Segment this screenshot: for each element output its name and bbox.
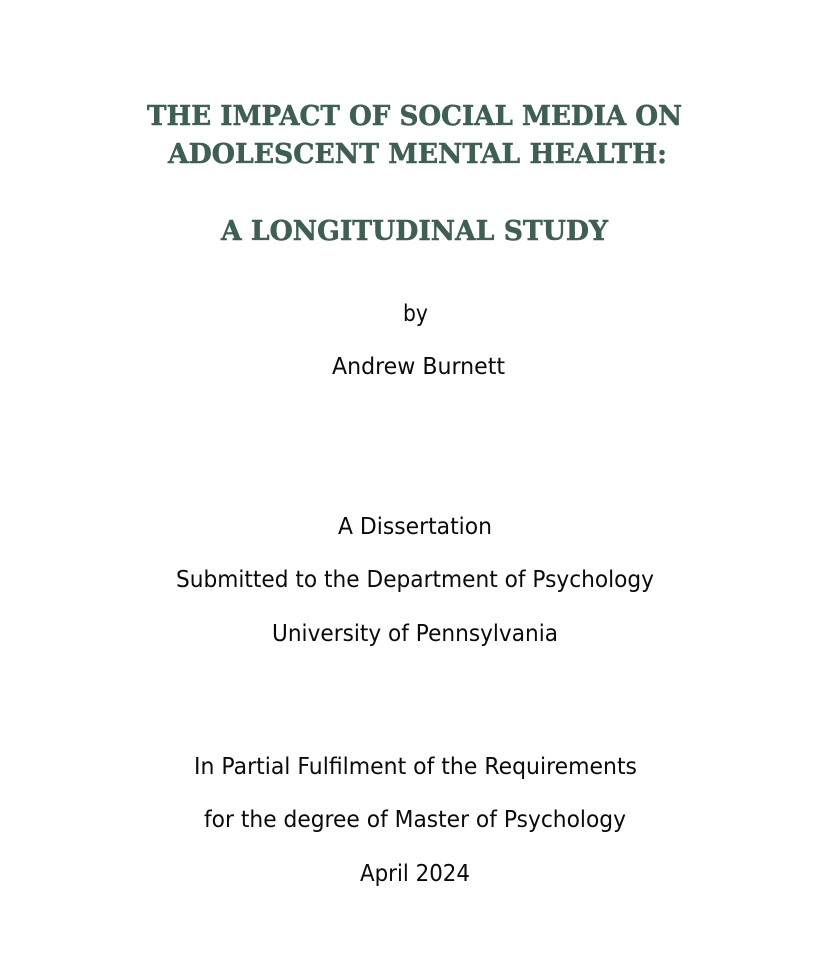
submission block: Submitted to the Department of Psychology <box>176 567 654 593</box>
author block: by <box>403 301 428 327</box>
author block: Andrew Burnett <box>332 354 505 380</box>
degree block: for the degree of Master of Psychology <box>204 807 626 833</box>
submission block: A Dissertation <box>338 514 492 540</box>
title <box>147 101 682 170</box>
author block <box>332 301 505 380</box>
submission block: University of Pennsylvania <box>272 621 558 647</box>
degree block <box>194 754 637 887</box>
degree block: In Partial Fulfilment of the Requirements <box>194 754 637 780</box>
title: ADOLESCENT MENTAL HEALTH: <box>167 139 667 170</box>
title: THE IMPACT OF SOCIAL MEDIA ON <box>147 101 682 132</box>
submission block <box>176 514 654 647</box>
subtitle: A LONGITUDINAL STUDY <box>220 216 609 247</box>
degree block: April 2024 <box>360 861 470 887</box>
